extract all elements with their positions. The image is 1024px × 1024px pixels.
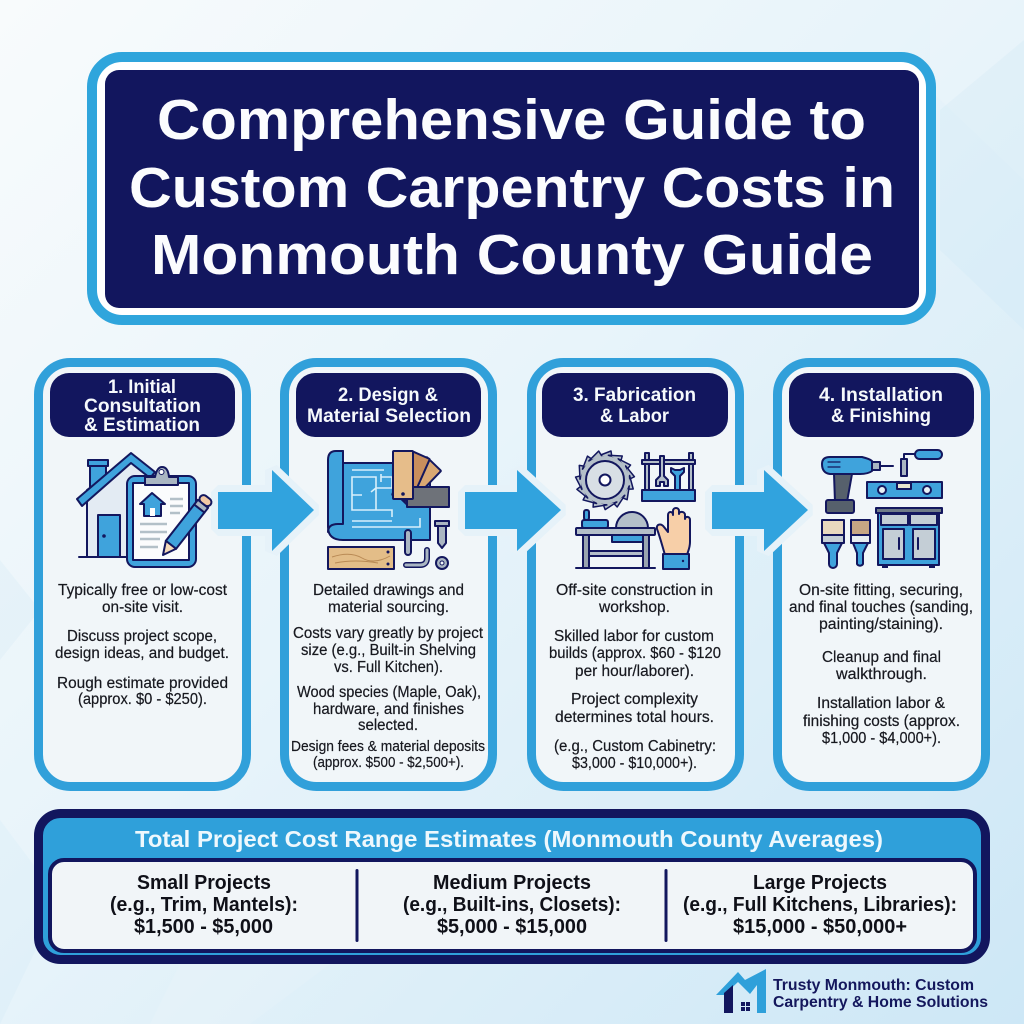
heading: step 3: & Labor — [600, 406, 670, 427]
text: step 2 details: Wood species (Maple, Oak), — [297, 684, 481, 701]
text: step 2 details: Costs vary greatly by project — [293, 625, 484, 642]
heading: step 4: 4. Installation — [819, 385, 943, 406]
column: small projects: (e.g., Trim, Mantels): — [110, 894, 298, 916]
text: step 3 details — [549, 582, 721, 772]
text: step 2 details: size (e.g., Built-in Shelving — [301, 642, 476, 659]
heading: step 3 — [542, 373, 728, 437]
title: Comprehensive Guide to — [157, 88, 866, 152]
text: step 3 details: Off-site construction in — [556, 582, 713, 599]
logo: Trusty Monmouth — [716, 969, 988, 1013]
text: step 1 details — [55, 582, 229, 708]
heading: step 4 — [789, 373, 974, 437]
text: step 3 details: Project complexity — [571, 691, 698, 708]
panel: step 1 — [38, 362, 246, 786]
text: company name: Trusty Monmouth: Custom — [773, 977, 974, 994]
heading: step 1: & Estimation — [84, 415, 200, 436]
icon: drill, level, brushes and cabinet — [822, 450, 942, 568]
title — [129, 88, 895, 287]
text: step 4 details: painting/staining). — [819, 616, 943, 633]
title panel — [92, 57, 931, 320]
text: step 3 details: Skilled labor for custom — [554, 628, 714, 645]
title: Custom Carpentry Costs in — [129, 156, 895, 220]
heading: step 2: 2. Design & — [338, 385, 438, 406]
column: small projects — [110, 872, 298, 938]
text: step 2 details: hardware, and finishes — [313, 701, 464, 718]
heading: step 2 — [296, 373, 481, 437]
arrow: step 1 to 2 — [218, 470, 314, 551]
text: step 3 details: per hour/laborer). — [575, 663, 694, 680]
text: step 3 details: $3,000 - $10,000+). — [572, 755, 697, 772]
text: step 3 details: determines total hours. — [555, 709, 714, 726]
column: medium projects: $5,000 - $15,000 — [437, 916, 587, 938]
table: project size estimates — [50, 860, 975, 951]
heading: step 3: 3. Fabrication — [573, 385, 696, 406]
panel: step 2 — [284, 362, 492, 786]
icon: house mark — [716, 969, 766, 1013]
text: step 2 details: (approx. $500 - $2,500+). — [313, 755, 464, 771]
text: step 4 details: walkthrough. — [835, 666, 927, 683]
text: step 4 details: $1,000 - $4,000+). — [822, 730, 941, 747]
text: step 1 details: Typically free or low-cost — [58, 582, 228, 599]
icon: house and estimate clipboard — [77, 453, 213, 567]
panel: total project cost ranges — [38, 814, 986, 960]
column: medium projects — [403, 872, 621, 938]
text: step 2 details: Detailed drawings and — [313, 582, 464, 599]
arrow: step 3 to 4 — [712, 470, 808, 551]
text: step 1 details: (approx. $0 - $250). — [78, 691, 207, 708]
column: large projects — [683, 872, 957, 938]
heading: step 4: & Finishing — [831, 406, 931, 427]
column: small projects: $1,500 - $5,000 — [134, 916, 273, 938]
heading: total cost: Total Project Cost Range Estimates (Monmouth County Averages) — [135, 826, 883, 852]
text: step 2 details — [291, 582, 485, 771]
icon: saw blade, tool rack, workbench and hand — [575, 451, 695, 569]
text: step 1 details: Discuss project scope, — [67, 628, 217, 645]
text: step 4 details: Cleanup and final — [822, 649, 941, 666]
title: Monmouth County Guide — [151, 223, 873, 287]
heading: step 2: Material Selection — [307, 406, 471, 427]
text: step 4 details — [789, 582, 973, 747]
text: step 2 details: vs. Full Kitchen). — [334, 659, 443, 676]
arrow: step 2 to 3 — [465, 470, 561, 551]
icon: blueprint, wood swatches and hardware — [328, 451, 449, 569]
heading: step 1: Consultation — [84, 396, 201, 417]
column: large projects: $15,000 - $50,000+ — [733, 916, 907, 938]
text: step 3 details: builds (approx. $60 - $120 — [549, 645, 721, 662]
text: company name: Carpentry & Home Solutions — [773, 994, 988, 1011]
column: medium projects: (e.g., Built-ins, Closets): — [403, 894, 621, 916]
heading: step 1 — [50, 373, 235, 437]
text: step 3 details: (e.g., Custom Cabinetry: — [554, 738, 716, 755]
text: step 4 details: finishing costs (approx. — [803, 713, 960, 730]
text: step 2 details: selected. — [358, 717, 418, 734]
text: step 2 details: Design fees & material deposits — [291, 739, 485, 755]
column: large projects: Large Projects — [753, 872, 887, 894]
heading: step 1: 1. Initial — [108, 377, 176, 398]
column: small projects: Small Projects — [137, 872, 271, 894]
panel: step 3 — [532, 362, 740, 786]
panel: step 4 — [778, 362, 986, 786]
text: step 3 details: workshop. — [598, 599, 670, 616]
column: medium projects: Medium Projects — [433, 872, 591, 894]
text: company name — [773, 977, 988, 1011]
text: step 4 details: and final touches (sanding, — [789, 599, 973, 616]
text: step 4 details: Installation labor & — [817, 695, 946, 712]
column: large projects: (e.g., Full Kitchens, Libraries): — [683, 894, 957, 916]
text: step 1 details: on-site visit. — [102, 599, 183, 616]
text: step 1 details: design ideas, and budget. — [55, 645, 229, 662]
text: step 2 details: material sourcing. — [328, 599, 449, 616]
text: step 4 details: On-site fitting, securing, — [799, 582, 963, 599]
text: step 1 details: Rough estimate provided — [57, 675, 228, 692]
